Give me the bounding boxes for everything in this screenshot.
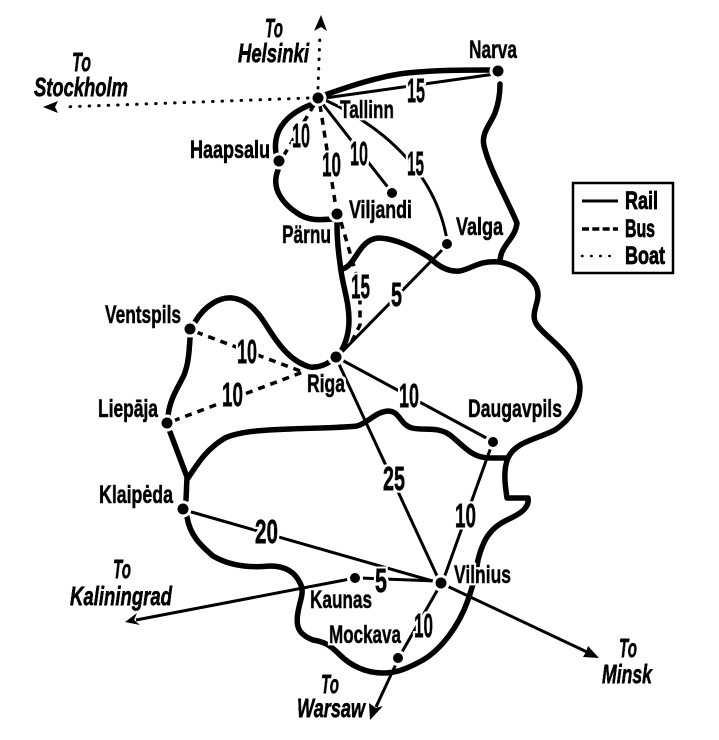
label: Tallinn: Tallinn (340, 96, 394, 124)
legend (573, 183, 673, 273)
boat to Helsinki (318, 32, 320, 88)
rail: Liepaja to Klaipeda (170, 432, 187, 500)
legend: Bus: Bus (625, 215, 655, 243)
label: To Stockholm: To (72, 47, 91, 77)
dot: Ventspils (183, 322, 197, 336)
thin rail-time lines (125, 74, 599, 720)
rail: eastern outer line (187, 238, 580, 673)
dot: Narva (491, 64, 505, 78)
Vilnius Mockava (402, 589, 438, 652)
label: Vilnius: Vilnius (454, 561, 511, 589)
travel time numbers: 15 (407, 72, 425, 109)
dot: Mockava (392, 652, 404, 664)
rail: Tallinn to Narva and Narva to Latvia border (322, 70, 517, 262)
rail: Klaipeda to Daugavpils border (188, 411, 508, 478)
label: To Warsaw (297, 669, 366, 723)
dot: Viljandi (386, 186, 398, 200)
label: To Stockholm (34, 47, 128, 102)
Kaunas Vilnius (360, 578, 436, 581)
legend: Boat: Boat (625, 242, 665, 270)
time: Vilnius Mockava 10: 10 (414, 607, 433, 644)
time: Tallinn Parnu 10: 10 (322, 146, 341, 183)
bus Tallinn Haapsalu (284, 105, 314, 155)
Klaipeda Vilnius (188, 511, 436, 582)
travel time numbers (222, 72, 476, 644)
label: Ventspils: Ventspils (105, 301, 181, 329)
time: Kaunas Vilnius 5: 5 (375, 562, 387, 599)
label: To Helsinki: To (265, 13, 283, 43)
arrow to Helsinki (314, 15, 327, 31)
label: Narva: Narva (469, 36, 518, 64)
dot: Klaipeda (176, 502, 190, 516)
label: To Minsk: Minsk (602, 659, 653, 689)
label: Riga: Riga (307, 370, 346, 398)
label: To Kaliningrad: To (113, 554, 131, 584)
label: To Kaliningrad: Kaliningrad (70, 581, 173, 611)
label: Klaipeda: Klaipėda (99, 481, 174, 509)
dot: Haapsalu (272, 154, 286, 168)
rail: Tallinn via Haapsalu to Parnu (275, 105, 333, 220)
label: To Kaliningrad (70, 554, 173, 611)
time: Valga Riga 5: 5 (391, 276, 402, 313)
bus Parnu Riga (341, 222, 360, 345)
Valga Riga (340, 248, 444, 354)
label: Valga: Valga (456, 213, 504, 241)
legend: Rail: Rail (625, 187, 658, 215)
label: Kaunas: Kaunas (310, 586, 372, 614)
dot: Riga (329, 350, 343, 364)
time: Ventspils Riga 10: 10 (237, 333, 257, 370)
time: Klaipeda Vilnius 20: 20 (255, 513, 278, 550)
label: Viljandi: Viljandi (349, 196, 412, 224)
time: Daugavpils Vilnius 10: 10 (455, 497, 476, 534)
bus Tallinn Parnu (320, 105, 336, 208)
label: To Stockholm: Stockholm (34, 72, 128, 102)
boat to Stockholm (62, 98, 308, 107)
label: To Warsaw: Warsaw (297, 693, 366, 723)
arrow to Warsaw (369, 703, 383, 720)
dot: Vilnius (434, 576, 448, 590)
label: Parnu: Pärnu (282, 221, 331, 249)
travel time numbers: 10 (350, 135, 368, 172)
label: To Helsinki: Helsinki (238, 38, 310, 68)
dot: Liepaja (160, 416, 174, 430)
travel time numbers: 15 (407, 145, 424, 182)
Riga Daugavpils (340, 359, 490, 440)
dot: Valga (440, 238, 454, 250)
city dots (160, 64, 505, 664)
rail: Ventspils to Liepaja (168, 338, 190, 416)
Tallinn Narva express (325, 74, 495, 98)
label: To Minsk (602, 633, 653, 689)
label: Liepaja: Liepāja (98, 395, 159, 423)
label: To Warsaw: To (321, 669, 339, 699)
label: To Helsinki (238, 13, 310, 68)
time: Parnu Riga 15: 15 (351, 268, 370, 305)
time: Riga Vilnius 25: 25 (383, 460, 405, 497)
label: Daugavpils: Daugavpils (468, 395, 562, 423)
dot: Tallinn (311, 91, 325, 105)
time: Liepaja Riga 10: 10 (222, 376, 243, 413)
Riga Vilnius (338, 362, 438, 578)
label: To Minsk: To (619, 633, 637, 663)
dot: Kaunas (348, 572, 362, 584)
Daugavpils Vilnius (444, 447, 491, 578)
line to Kaliningrad (136, 579, 350, 620)
line to Warsaw (376, 664, 396, 707)
bus Liepaja Riga (173, 372, 303, 421)
label: Haapsalu: Haapsalu (190, 136, 270, 164)
travel time numbers: 10 (292, 117, 310, 154)
arrow to Kaliningrad (125, 613, 140, 625)
Tallinn Valga (325, 100, 447, 240)
bus and boat routes (43, 15, 360, 421)
arrow to Stockholm (43, 101, 58, 113)
legend box (573, 183, 673, 273)
time: Riga Daugavpils 10: 10 (399, 377, 419, 414)
map of Baltic states border and rail network (43, 15, 599, 720)
rail: Ventspils to Riga (195, 298, 331, 367)
dot: Parnu (330, 207, 344, 221)
dot: Daugavpils (486, 436, 500, 448)
line to Minsk (447, 586, 587, 652)
bus Ventspils Riga (196, 332, 303, 372)
city labels (98, 36, 562, 649)
rail: Parnu to Riga (337, 223, 349, 353)
Tallinn Viljandi (322, 103, 390, 190)
arrow to Minsk (583, 646, 599, 658)
label: Mockava: Mockava (329, 621, 402, 649)
